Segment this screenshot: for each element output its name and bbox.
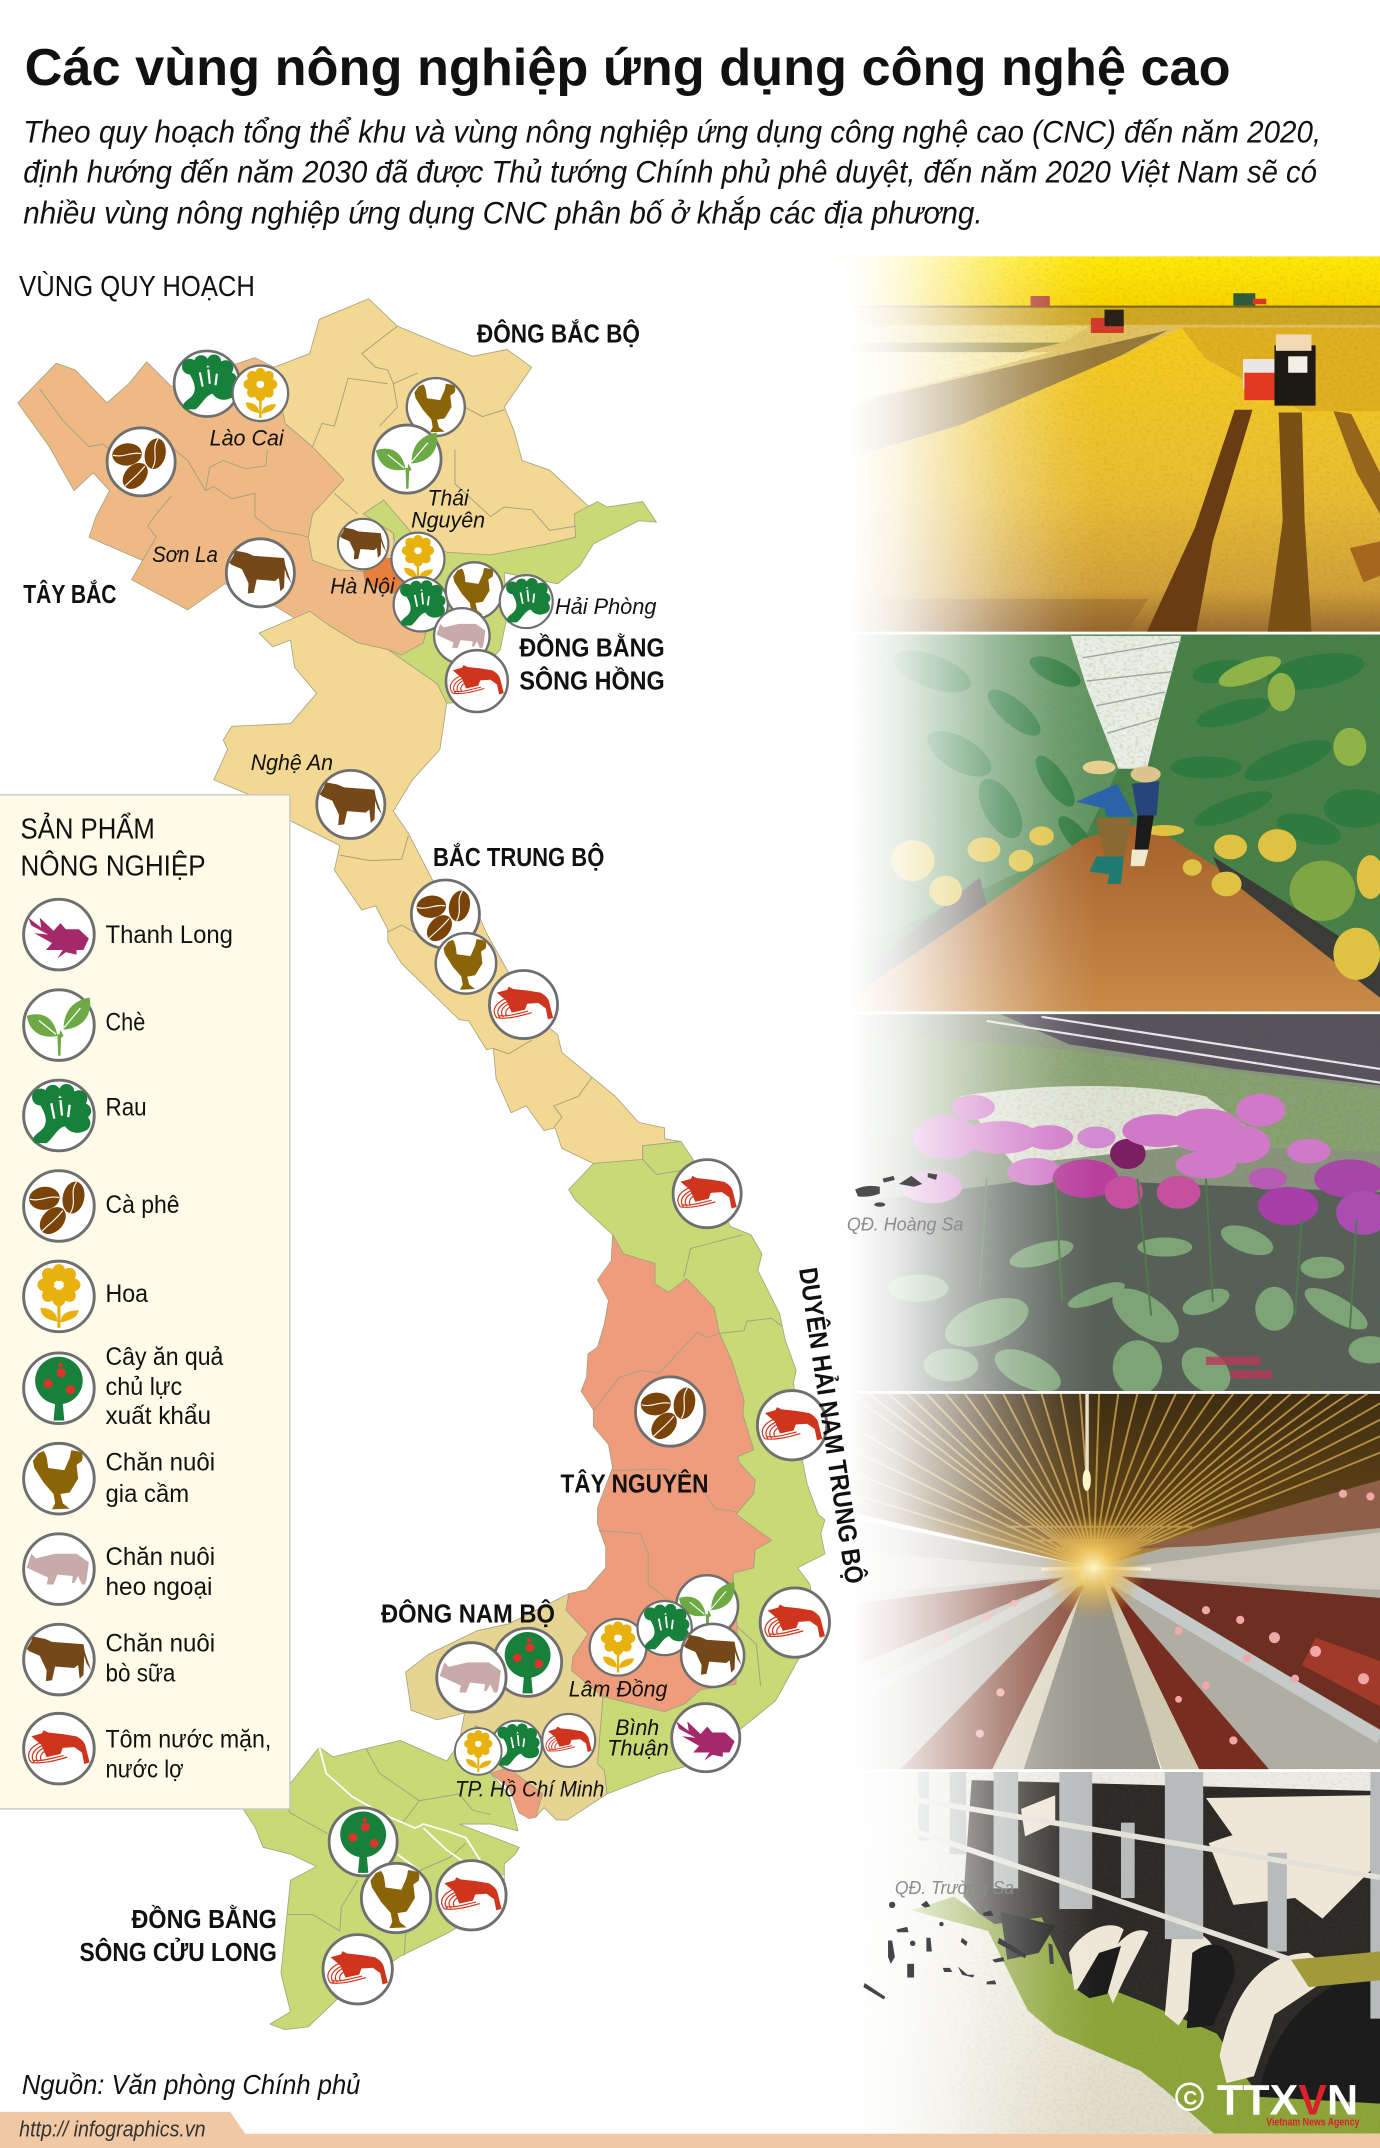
legend item: flowers: Hoa [106, 1281, 148, 1308]
intro text: nhiều vùng nông nghiệp ứng dụng CNC phân bố ở khắp các địa phương. [23, 194, 983, 230]
title: Các vùng nông nghiệp ứng dụng công nghệ cao [25, 39, 1231, 97]
legend item: tea: Chè [106, 1010, 145, 1037]
map icons: Bắc Trung Bộ [317, 770, 558, 1039]
map icons: Duyên hải Nam Trung Bộ [672, 1160, 830, 1772]
region: Tây Bắc [18, 358, 429, 655]
region labels [23, 319, 870, 1967]
province labels: Nguyên [411, 508, 485, 533]
legend item: pigs [24, 1534, 215, 1604]
legend item: coffee [24, 1171, 180, 1241]
region labels: SÔNG CỬU LONG [79, 1937, 277, 1967]
province labels: Hà Nội [330, 573, 396, 598]
legend item: pigs: heo ngoại [106, 1574, 212, 1601]
region: TP. Hồ Chí Minh [466, 1725, 543, 1819]
Trường Sa islands [863, 1901, 1054, 1999]
region: Đông Nam Bộ [406, 1594, 607, 1820]
region: Đồng bằng sông Cửu Long [244, 1740, 519, 2030]
region labels: ĐỒNG BẰNG [132, 1904, 277, 1934]
region labels: SÔNG HỒNG [519, 665, 665, 695]
province labels: Hải Phòng [555, 594, 656, 619]
legend item: dragon fruit [24, 899, 233, 970]
legend item: dairy cows: bò sữa [106, 1661, 176, 1688]
legend item: flowers [24, 1261, 148, 1332]
region: Bắc Trung Bộ [214, 611, 681, 1163]
photo: rice field harvest [830, 256, 1380, 632]
photo: poultry house [830, 1394, 1380, 1769]
label: Hoàng Sa: QĐ. Hoàng Sa [847, 1214, 963, 1235]
region labels: ĐỒNG BẰNG [519, 632, 665, 662]
footer bar [0, 2112, 1380, 2148]
province labels: Thuận [607, 1736, 669, 1761]
intro text: Theo quy hoạch tổng thể khu và vùng nông nghiệp ứng dụng công nghệ cao (CNC) đến năm 2020, [23, 114, 1321, 150]
source: Nguồn: Văn phòng Chính phủ [22, 2069, 360, 2100]
legend item: shrimp [24, 1713, 271, 1784]
heading: planning zones: VÙNG QUY HOẠCH [19, 270, 255, 303]
region: Tây Nguyên [566, 1235, 772, 1712]
map icons: Tây Nguyên [590, 1377, 744, 1687]
legend item: export fruit trees [24, 1344, 224, 1430]
province labels [152, 425, 669, 1802]
legend item: export fruit trees: xuất khẩu [106, 1403, 211, 1430]
legend item: poultry [24, 1443, 215, 1514]
logo: TTXVN: TTXVN [1217, 2078, 1358, 2125]
legend item: vegetables [24, 1080, 147, 1151]
legend item: dairy cows: Chăn nuôi [106, 1630, 215, 1657]
region labels: TÂY BẮC [23, 579, 117, 609]
legend item: vegetables: Rau [106, 1095, 147, 1122]
map icons: Tây Bắc [107, 351, 294, 607]
region: Đông Bắc Bộ [274, 299, 589, 571]
legend item: poultry: Chăn nuôi [106, 1449, 215, 1476]
legend heading: SẢN PHẨM [21, 812, 155, 846]
Hoàng Sa islands [855, 1173, 937, 1207]
region: Duyên hải Nam Trung Bộ [569, 1142, 825, 1794]
legend panel [0, 795, 290, 1809]
province labels: Bình [615, 1715, 659, 1740]
province labels: Nghệ An [251, 750, 333, 775]
map of Vietnam [18, 299, 825, 2030]
region labels: TÂY NGUYÊN [560, 1468, 709, 1498]
legend item: pigs: Chăn nuôi [106, 1544, 215, 1571]
legend item: poultry: gia cầm [106, 1481, 189, 1508]
legend heading [21, 812, 206, 883]
photo: melon greenhouse [830, 635, 1380, 1011]
legend item: export fruit trees: chủ lực [106, 1374, 182, 1401]
region: Đồng bằng sông Hồng [363, 500, 656, 703]
region labels: BẮC TRUNG BỘ [433, 842, 604, 872]
legend item: shrimp: Tôm nước mặn, [106, 1726, 271, 1753]
intro text: định hướng đến năm 2030 đã được Thủ tướng Chính phủ phê duyệt, đến năm 2020 Việt Nam sẽ có [23, 153, 1317, 189]
legend item: dragon fruit: Thanh Long [106, 922, 233, 949]
legend item: tea [24, 990, 145, 1060]
region labels: ĐÔNG NAM BỘ [381, 1599, 555, 1629]
legend item: dairy cows [24, 1624, 215, 1695]
province labels: Thái [428, 486, 470, 511]
url: http:// infographics.vn [19, 2116, 206, 2141]
legend item: export fruit trees: Cây ăn quả [106, 1344, 224, 1371]
map icons: Đồng bằng sông Cửu Long [323, 1808, 506, 2004]
label: Trường Sa: QĐ. Trường Sa [895, 1877, 1014, 1898]
region: Hà Nội [363, 534, 436, 593]
map icons: Đồng bằng sông Hồng [338, 519, 553, 712]
map icons: Đông Nam Bộ [437, 1628, 595, 1775]
region labels: DUYÊN HẢI NAM TRUNG BỘ [793, 1265, 870, 1586]
province labels: TP. Hồ Chí Minh [455, 1777, 604, 1802]
province labels: Sơn La [152, 542, 218, 567]
map: province boundaries [40, 326, 783, 1956]
province labels: Lâm Đồng [569, 1677, 667, 1702]
intro text [23, 114, 1321, 230]
legend item: coffee: Cà phê [106, 1192, 180, 1219]
photo fade [830, 256, 1098, 2135]
province labels: Lào Cai [210, 425, 285, 450]
photo: dairy cows [897, 1772, 1380, 2134]
logo: TTXVN: C [1183, 2088, 1197, 2109]
region labels: ĐÔNG BẮC BỘ [477, 319, 640, 349]
photo: orchid greenhouse [830, 1014, 1380, 1403]
legend item: shrimp: nước lợ [106, 1756, 184, 1783]
map icons: Đông Bắc Bộ [373, 378, 465, 493]
logo: TTXVN: Vietnam News Agency [1266, 2117, 1360, 2129]
legend heading: NÔNG NGHIỆP [21, 849, 206, 883]
